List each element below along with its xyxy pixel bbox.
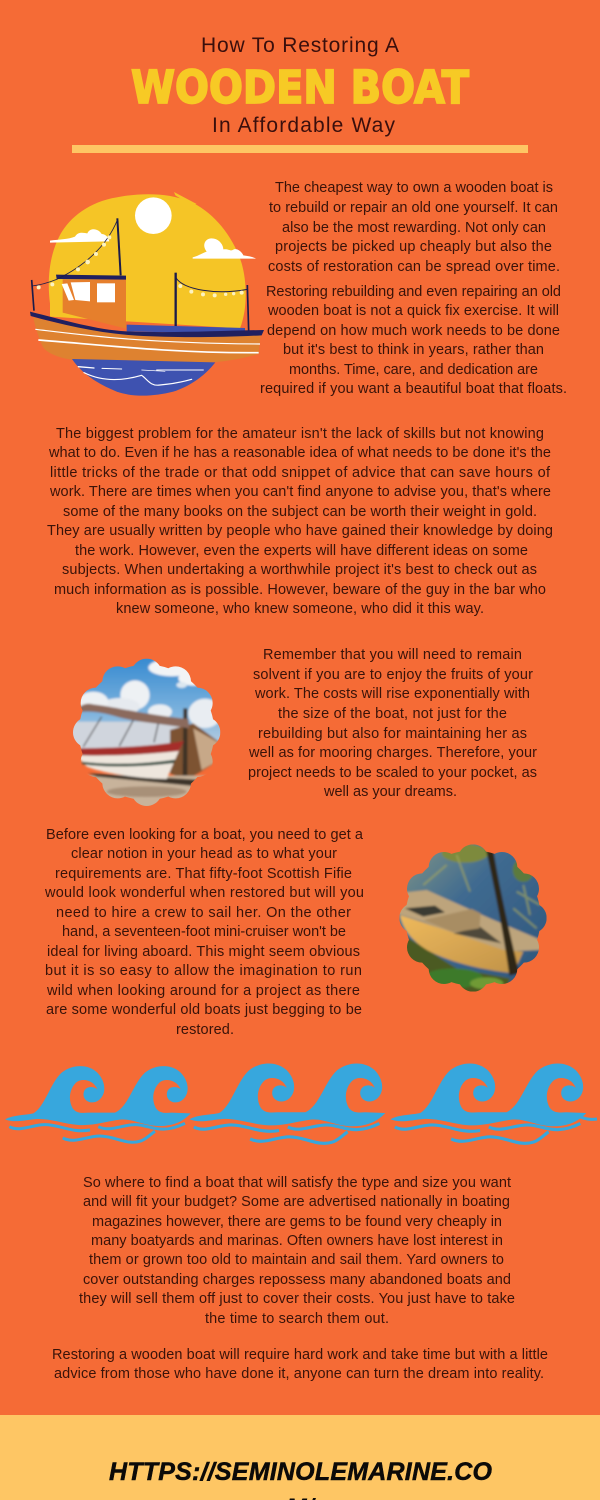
paragraph: where to find a boat: them or grown too old to maintain and sail them. Yard owners to xyxy=(89,1252,504,1268)
paragraph: biggest problem: some of the many books on the subject can be worth their weight in gold. xyxy=(63,504,537,520)
paragraph: not a quick fix: depend on how much work needs to be done xyxy=(267,323,560,339)
paragraph: remain solvent xyxy=(248,647,537,800)
title: line one: How To Restoring A xyxy=(201,34,399,57)
paragraph: where to find a boat: they will sell them off just to cover their costs. You just have to take xyxy=(79,1291,515,1307)
lake xyxy=(399,844,547,983)
sand xyxy=(88,774,206,806)
footer url: HTTPS://SEMINOLEMARINE.CO xyxy=(109,1458,493,1486)
paragraph: remain solvent: project needs to be scaled to your pocket, as xyxy=(248,765,537,781)
paragraph: remain solvent: rebuilding but also for maintaining her as xyxy=(258,726,527,742)
cloud left xyxy=(50,229,109,243)
paragraph: cheapest way xyxy=(268,180,560,275)
paragraph: remain solvent: solvent if you are to enjoy the fruits of your xyxy=(253,667,533,683)
boat top rail xyxy=(397,890,545,952)
paragraph: conclusion xyxy=(52,1347,548,1382)
paragraph: know your requirements: need to hire a crew to sail her. On the other xyxy=(56,905,351,921)
cabin shelter xyxy=(170,723,223,780)
paragraph: know your requirements: are some wonderful old boats just begging to be xyxy=(46,1002,362,1018)
paragraph: remain solvent: well as your dreams. xyxy=(323,784,457,800)
leaves xyxy=(423,855,540,928)
canopy poles xyxy=(83,717,158,747)
paragraph: biggest problem: little tricks of the trade or that odd snippet of advice that can save hours of xyxy=(50,465,551,481)
foliage top xyxy=(442,844,488,863)
hull white xyxy=(75,748,180,779)
white sun xyxy=(135,197,172,234)
title underline xyxy=(72,145,528,153)
paragraph: where to find a boat: many boatyards and marinas. Often owners have lost interest in xyxy=(91,1233,503,1249)
navy gunwale xyxy=(30,312,264,337)
tree trunk xyxy=(485,844,519,976)
paragraph: where to find a boat: magazines however, there are gems to be found very cheaply in xyxy=(92,1214,502,1230)
thwart seat xyxy=(423,909,481,932)
paragraph: not a quick fix: wooden boat is not a quick fix exercise. It will xyxy=(267,303,559,319)
illustration: fishing boat at sunset xyxy=(30,192,264,396)
paragraph: conclusion: Restoring a wooden boat will require hard work and take time but with a little xyxy=(52,1347,548,1363)
paragraph: conclusion: advice from those who have done it, anyone can turn the dream into reality. xyxy=(54,1366,544,1382)
paragraph: not a quick fix: Restoring rebuilding and even repairing an old xyxy=(266,284,561,300)
paragraph: biggest problem: much information as is possible. However, beware of the guy in the bar who xyxy=(54,582,546,598)
paragraph: cheapest way: to rebuild or repair an old one yourself. It can xyxy=(269,200,558,216)
paragraph: know your requirements xyxy=(44,827,364,1038)
paragraph: cheapest way: also be the most rewarding. Not only can xyxy=(282,220,546,236)
hull white stripes xyxy=(35,329,260,344)
paragraph: know your requirements: restored. xyxy=(176,1022,234,1038)
paragraph: where to find a boat: and will fit your budget? Some are advertised nationally in boating xyxy=(83,1194,510,1210)
title block xyxy=(72,34,528,153)
paragraph: biggest problem: the work. However, even the experts will have different ideas on some xyxy=(75,543,528,559)
paragraph: know your requirements: clear notion in your head as to what your xyxy=(71,846,337,862)
paragraph: not a quick fix: but it's best to think in years, rather than xyxy=(283,342,544,358)
paragraph: remain solvent: well as for mooring charges. Therefore, your xyxy=(248,745,537,761)
string lights xyxy=(37,235,244,297)
paragraph: cheapest way: projects be picked up cheaply but also the xyxy=(275,239,552,255)
hull green stripe xyxy=(81,760,175,766)
paragraph: know your requirements: Before even looking for a boat, you need to get a xyxy=(46,827,364,843)
hull xyxy=(33,317,261,362)
paragraph: biggest problem: They are usually written by people who have gained their knowledge by doing xyxy=(47,523,553,539)
paragraph: biggest problem: subjects. When undertaking a worthwhile project it's best to check out as xyxy=(62,562,537,578)
wave divider xyxy=(5,1063,597,1143)
hull shadow xyxy=(88,773,203,787)
footer band xyxy=(0,1415,600,1500)
clouds xyxy=(148,659,195,676)
hull red stripe xyxy=(70,741,184,756)
paragraph: where to find a boat xyxy=(79,1175,515,1327)
sky xyxy=(76,658,220,742)
paragraph: where to find a boat: cover outstanding charges repossess many abandoned boats and xyxy=(83,1272,511,1288)
paragraph: know your requirements: but it is so easy to allow the imagination to run xyxy=(45,963,362,979)
interior shadows xyxy=(405,906,445,917)
paragraph: not a quick fix: months. Time, care, and dedication are xyxy=(289,362,538,378)
paragraph: remain solvent: Remember that you will need to remain xyxy=(263,647,522,663)
photo: old rowing boat by a lake xyxy=(399,844,547,992)
photo: beached boat with canopy xyxy=(73,658,220,806)
cabin roof xyxy=(56,275,126,280)
boat hull xyxy=(400,915,523,973)
ground foliage xyxy=(407,936,511,992)
cloud right xyxy=(193,238,256,259)
paragraph: biggest problem: The biggest problem for the amateur isn't the lack of skills but not knowing xyxy=(56,426,544,442)
sun backdrop xyxy=(49,194,246,328)
paragraph: not a quick fix xyxy=(260,284,567,397)
title: wooden boat: WOODEN BOAT xyxy=(131,61,469,114)
paragraph: not a quick fix: required if you want a beautiful boat that floats. xyxy=(260,381,567,397)
paragraph: remain solvent: the size of the boat, not just for the xyxy=(278,706,507,722)
paragraph: biggest problem: work. There are times when you can't find anyone to advise you, that's where xyxy=(49,484,551,500)
paragraph: biggest problem xyxy=(47,426,553,617)
paragraph: biggest problem: what to do. Even if he has a reasonable idea of what needs to be done it's the xyxy=(48,445,551,461)
masts and rigging xyxy=(32,218,249,333)
paragraph: know your requirements: hand, a seventeen-foot mini-cruiser won't be xyxy=(62,924,346,940)
cabin xyxy=(63,279,126,329)
paragraph: know your requirements: requirements are. That fifty-foot Scottish Fifie xyxy=(55,866,352,882)
paragraph: remain solvent: work. The costs will rise exponentially with xyxy=(254,686,530,702)
water highlights xyxy=(78,367,203,385)
canopy xyxy=(73,704,189,728)
paragraph: biggest problem: knew someone, who knew someone, who did it this way. xyxy=(116,601,484,617)
paragraph: know your requirements: would look wonderful when restored but will you xyxy=(44,885,364,901)
title: line three: In Affordable Way xyxy=(212,114,396,137)
paragraph: where to find a boat: the time to search them out. xyxy=(205,1311,389,1327)
paragraph: cheapest way: costs of restoration can be spread over time. xyxy=(268,259,560,275)
water xyxy=(72,359,215,396)
paragraph: cheapest way: The cheapest way to own a wooden boat is xyxy=(275,180,553,196)
paragraph: where to find a boat: So where to find a boat that will satisfy the type and size you want xyxy=(83,1175,511,1191)
paragraph: know your requirements: wild when looking around for a project as there xyxy=(46,983,360,999)
paragraph: know your requirements: ideal for living aboard. This might seem obvious xyxy=(47,944,360,960)
blue deck band xyxy=(127,325,245,334)
cabin windows xyxy=(62,283,74,301)
